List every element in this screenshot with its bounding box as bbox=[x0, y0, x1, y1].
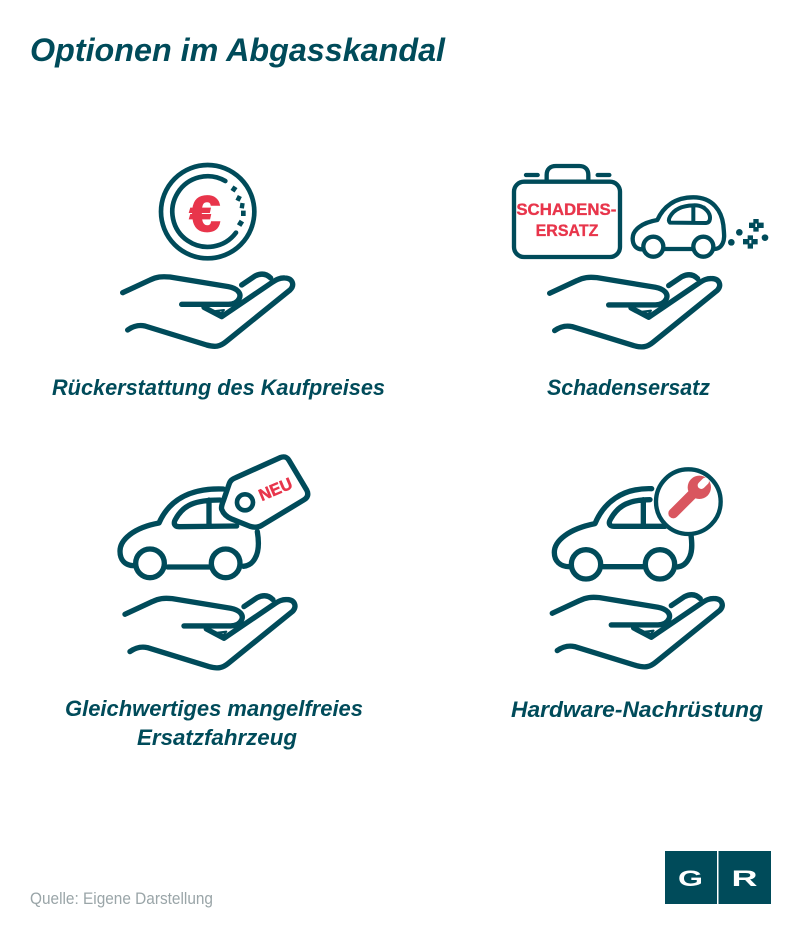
title: Optionen im Abgasskandal bbox=[30, 32, 446, 68]
icon: car with wrench bbox=[554, 469, 721, 579]
logo: R bbox=[732, 866, 758, 891]
icon: small car with exhaust bbox=[633, 197, 768, 257]
icon: briefcase: SCHADENS- bbox=[516, 201, 616, 219]
label: Rückerstattung des Kaufpreises bbox=[52, 375, 385, 400]
panel: Hardware-Nachrüstung bbox=[511, 469, 764, 722]
label: Gleichwertiges mangelfreies bbox=[65, 696, 363, 721]
icon: euro coin bbox=[161, 165, 254, 258]
icon: briefcase: ERSATZ bbox=[536, 222, 598, 240]
icon: open hand bbox=[123, 274, 293, 346]
logo bbox=[665, 851, 771, 904]
label: Hardware-Nachrüstung bbox=[511, 697, 764, 722]
logo: G bbox=[678, 866, 703, 891]
panel: Gleichwertiges mangelfreies Ersatzfahrzeug bbox=[65, 457, 363, 750]
icon: open hand bbox=[552, 595, 722, 667]
label: Ersatzfahrzeug bbox=[137, 725, 298, 750]
icon: car with tag bbox=[120, 457, 308, 578]
icon: car with tag: NEU bbox=[256, 474, 295, 505]
icon: open hand bbox=[550, 275, 720, 347]
icon: briefcase bbox=[514, 166, 620, 257]
source note: Quelle: Eigene Darstellung bbox=[30, 890, 213, 908]
panel: Schadensersatz bbox=[514, 166, 768, 400]
icon: euro coin: € bbox=[190, 186, 220, 242]
label: Schadensersatz bbox=[547, 375, 710, 400]
panel: Rückerstattung des Kaufpreises bbox=[52, 165, 385, 400]
icon: open hand bbox=[125, 596, 295, 668]
label bbox=[65, 696, 363, 750]
